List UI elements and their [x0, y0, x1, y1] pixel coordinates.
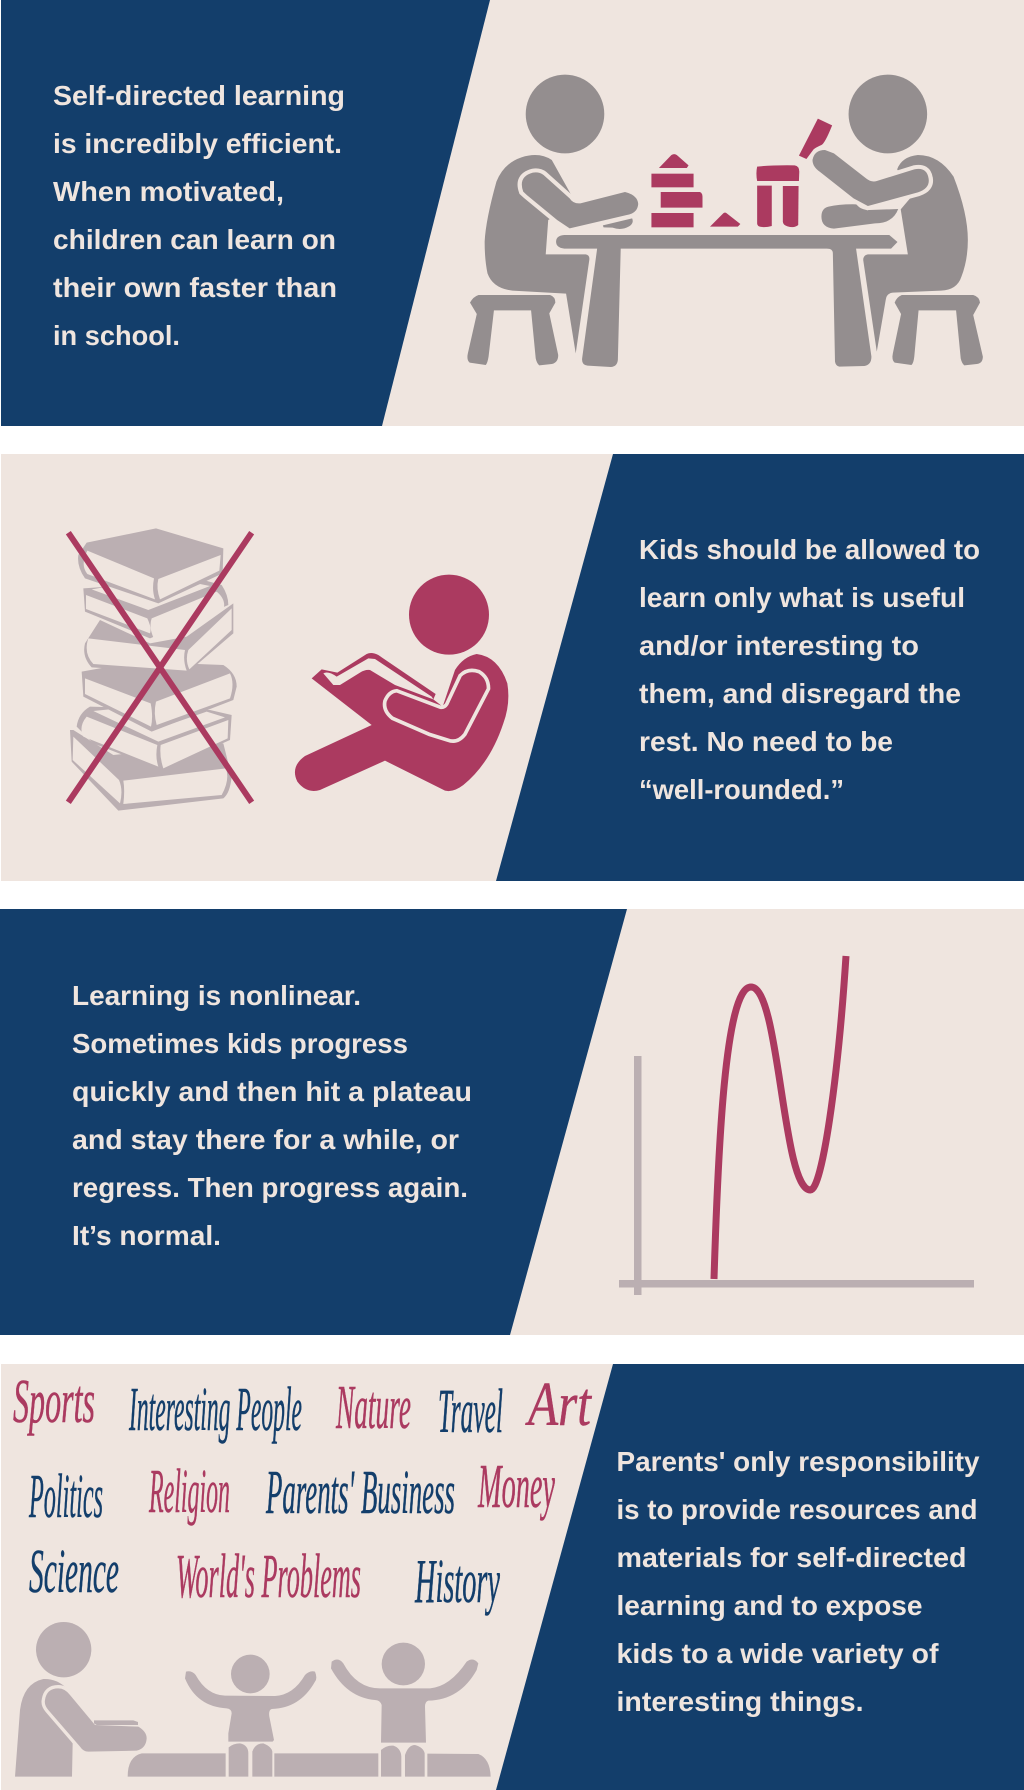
- text: self-directed learning: When motivated,: [53, 176, 284, 207]
- text: learning is nonlinear: and stay there for a while, or: [72, 1124, 459, 1155]
- parent: [15, 1622, 147, 1777]
- text: parents' only responsibility: materials for self-directed: [616, 1542, 966, 1573]
- topic words in script lettering: Politics: [29, 1463, 103, 1531]
- topic words in script lettering: Nature: [336, 1374, 411, 1442]
- left child: [485, 75, 638, 353]
- text: self-directed learning: is incredibly efficient.: [53, 128, 342, 159]
- text: kids should be allowed: learn only what is useful: [639, 582, 965, 613]
- panel: self-directed learning: [1, 0, 1024, 426]
- panel 1 cream background: [1, 0, 1024, 426]
- icon: child reading a book: [295, 575, 508, 791]
- second book: [83, 580, 228, 638]
- topic words in script lettering: Parents' Business: [266, 1459, 455, 1527]
- fifth book: [77, 707, 232, 770]
- text: parents' only responsibility: interesting things.: [616, 1686, 864, 1717]
- blocks: [651, 119, 832, 227]
- panel 3 cream background: [0, 909, 1024, 1335]
- text: learning is nonlinear: [72, 980, 472, 1251]
- body and legs: [295, 653, 508, 791]
- y axis: [634, 1056, 642, 1295]
- text: learning is nonlinear: Sometimes kids progress: [72, 1028, 408, 1059]
- arm: [386, 672, 487, 739]
- x axis: [619, 1280, 974, 1288]
- progress curve: [714, 956, 846, 1279]
- top book: [78, 528, 223, 603]
- text: self-directed learning: their own faster than: [53, 272, 337, 303]
- text: self-directed learning: Self-directed learning: [53, 80, 345, 111]
- topic words in script lettering: Science: [29, 1538, 119, 1606]
- head: [409, 575, 489, 655]
- topic words in script lettering: Money: [478, 1453, 555, 1521]
- icon: parent and two children on a mat: [15, 1622, 491, 1777]
- floor mat: [128, 1753, 491, 1777]
- panel: learning is nonlinear: [0, 909, 1024, 1335]
- topic words in script lettering: Interesting People: [129, 1376, 302, 1444]
- text: parents' only responsibility: kids to a wide variety of: [616, 1638, 939, 1669]
- text: parents' only responsibility: Parents' only responsibility: [616, 1446, 980, 1477]
- icon: crossed-out stack of books: [68, 528, 252, 811]
- taller child with raised arms: [331, 1643, 478, 1777]
- panel: parents' responsibility: [1, 1364, 1024, 1790]
- topic words in script lettering: Art: [525, 1371, 592, 1439]
- text: self-directed learning: children can learn on: [53, 224, 336, 255]
- topic words in script lettering: [13, 1368, 592, 1616]
- topic words in script lettering: World's Problems: [176, 1543, 361, 1611]
- text: kids should be allowed: rest. No need to be: [639, 726, 893, 757]
- panel 3 blue slanted block: [0, 909, 627, 1335]
- smaller child with raised arms: [185, 1655, 316, 1777]
- text: parents' only responsibility: learning and to expose: [616, 1590, 922, 1621]
- right stool: [892, 295, 983, 365]
- chart: nonlinear progress curve: [619, 956, 974, 1295]
- text: kids should be allowed: “well-rounded.”: [639, 774, 844, 805]
- text: learning is nonlinear: regress. Then progress again.: [72, 1172, 468, 1203]
- right child: [812, 75, 968, 352]
- panel 2 blue slanted block: [496, 454, 1024, 881]
- panel 4 cream background: [1, 1364, 1024, 1790]
- text: self-directed learning: [53, 80, 345, 351]
- text: learning is nonlinear: It’s normal.: [72, 1220, 221, 1251]
- topic words in script lettering: Religion: [149, 1458, 230, 1526]
- fourth book: [82, 662, 237, 732]
- text: parents' only responsibility: is to provide resources and: [616, 1494, 978, 1525]
- topic words in script lettering: History: [415, 1548, 500, 1616]
- open book pages: [323, 658, 433, 699]
- third book: [84, 603, 233, 673]
- panel: learn what is useful: [1, 454, 1024, 881]
- text: kids should be allowed: them, and disregard the: [639, 678, 961, 709]
- text: self-directed learning: in school.: [53, 320, 180, 351]
- icon: two children playing with blocks at a table: [467, 75, 983, 367]
- text: kids should be allowed: [639, 534, 980, 805]
- topic words in script lettering: Sports: [13, 1368, 95, 1436]
- text: kids should be allowed: Kids should be allowed to: [639, 534, 980, 565]
- panel 1 blue slanted block: [1, 0, 490, 426]
- topic words in script lettering: Travel: [438, 1378, 503, 1446]
- panel 2 cream background: [1, 454, 1024, 881]
- text: parents' only responsibility: [616, 1446, 980, 1717]
- left stool: [467, 295, 558, 365]
- text: kids should be allowed: and/or interesting to: [639, 630, 919, 661]
- panel 4 blue slanted block: [496, 1364, 1024, 1790]
- text: learning is nonlinear: Learning is nonlinear.: [72, 980, 361, 1011]
- red cross: [68, 533, 252, 802]
- table: [556, 235, 897, 367]
- text: learning is nonlinear: quickly and then hit a plateau: [72, 1076, 472, 1107]
- bottom book: [70, 730, 232, 811]
